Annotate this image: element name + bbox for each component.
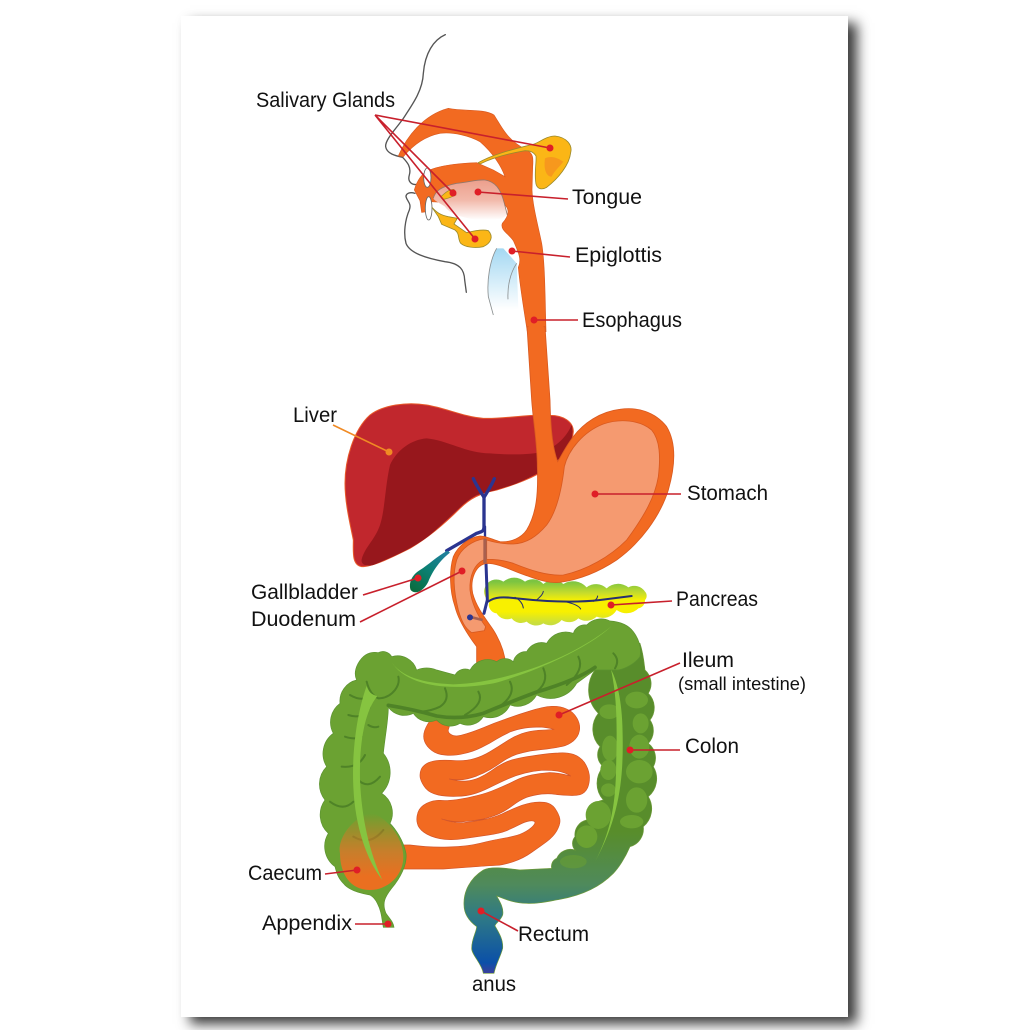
label: esophagus: Esophagus xyxy=(582,309,682,332)
bile ducts xyxy=(447,479,494,551)
transverse colon centre strip xyxy=(391,626,612,687)
label dots xyxy=(354,144,634,928)
face outline xyxy=(386,35,466,292)
teeth xyxy=(424,168,432,220)
label: anus: anus xyxy=(472,973,516,996)
esophagus seam cover xyxy=(528,322,544,336)
ascending colon centre strip xyxy=(353,686,382,880)
label: rectum: Rectum xyxy=(518,923,589,946)
sublingual salivary gland xyxy=(441,189,456,199)
label: pancreas: Pancreas xyxy=(676,588,758,611)
labels xyxy=(248,89,806,996)
pancreas xyxy=(484,578,647,626)
leader lines and dots xyxy=(325,115,681,931)
pharynx, nasal arch and mouth roof xyxy=(398,108,546,332)
transverse colon lower shadow band xyxy=(388,667,595,717)
gallbladder xyxy=(410,551,450,592)
duodenum lumen xyxy=(454,539,486,633)
submandibular salivary gland xyxy=(432,207,491,247)
leader: colon xyxy=(630,749,680,751)
parotid salivary gland xyxy=(478,136,571,189)
liver, stomach, ducts, pancreas xyxy=(345,327,674,667)
label: gallbladder: Gallbladder xyxy=(251,581,358,604)
leader: gallbladder xyxy=(363,578,418,595)
pyloric sphincter xyxy=(480,539,490,563)
leader: appendix xyxy=(355,923,388,925)
pancreatic duct xyxy=(484,563,632,613)
leader: liver xyxy=(333,425,389,452)
esophagus, stomach and duodenum wall xyxy=(451,327,674,667)
ascending and transverse colon with caecum xyxy=(319,619,640,927)
leader: ileum xyxy=(559,663,680,715)
leader: stomach xyxy=(595,493,681,495)
colon creases xyxy=(330,653,617,840)
label: colon: Colon xyxy=(685,735,739,758)
leader: tongue xyxy=(478,192,568,199)
caecum orange area xyxy=(340,813,403,890)
label: salivary glands: Salivary Glands xyxy=(256,89,395,112)
leader: caecum xyxy=(325,870,357,874)
liver xyxy=(345,404,573,567)
leader: epiglottis xyxy=(512,251,570,257)
label: epiglottis: Epiglottis xyxy=(575,244,662,267)
label: small intestine: (small intestine) xyxy=(678,674,806,694)
descending colon centre strip xyxy=(595,669,623,862)
leader: esophagus xyxy=(534,319,578,321)
descending colon and rectum xyxy=(464,640,657,973)
large intestine xyxy=(319,619,657,973)
tongue xyxy=(433,180,507,220)
descending colon haustra xyxy=(560,692,653,868)
ampulla dot xyxy=(467,614,483,620)
poster sheet with drop shadow xyxy=(181,16,848,1017)
leader: duodenum xyxy=(360,571,462,622)
label: appendix: Appendix xyxy=(262,912,353,935)
leader: pancreas xyxy=(611,601,672,605)
label: stomach: Stomach xyxy=(687,482,768,505)
stomach lumen xyxy=(487,421,659,575)
trachea xyxy=(488,248,518,315)
ileum (small intestine) xyxy=(397,706,589,869)
label: ileum: Ileum xyxy=(682,649,734,672)
label: caecum: Caecum xyxy=(248,862,322,885)
head and mouth anatomy xyxy=(386,35,571,332)
label: tongue: Tongue xyxy=(572,186,642,209)
leader: rectum xyxy=(481,911,518,931)
label: duodenum: Duodenum xyxy=(251,608,356,631)
label: liver: Liver xyxy=(293,404,337,427)
leader: salivary glands xyxy=(375,115,550,239)
